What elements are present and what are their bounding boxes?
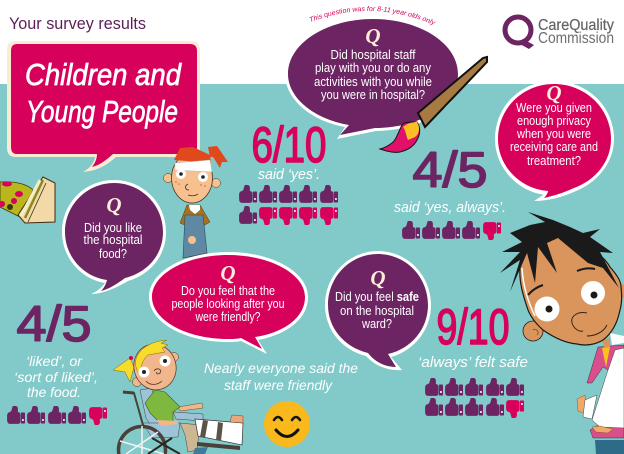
thumbs [8,406,107,425]
caption: said ‘yes’. [258,166,320,183]
Q mark: Q [365,24,381,48]
note: nearly everyone: Nearly everyone said the [204,360,358,376]
big number: 4/5 [412,142,488,198]
question text: you were in hospital? [321,88,425,102]
icon: paintbrush [380,57,487,152]
character: girl with head bandage [164,146,228,258]
big number: 6/10 [252,117,326,173]
question text [172,284,285,324]
panel: safety question [325,251,431,370]
result: 4/5 privacy [394,142,506,240]
caption: ‘sort of liked’, [14,369,98,385]
question text: play with you or do any [315,61,432,75]
note: nearly everyone [204,360,358,393]
big number: 4/5 [16,296,92,352]
question text: food? [99,247,127,261]
logo: Care Quality Commission: CareQuality [538,17,614,34]
question text: the hospital [84,233,142,247]
question text: Did you feel safe [335,290,419,304]
question text: ward? [361,317,392,331]
question text [84,221,142,261]
Q mark: Q [220,261,236,285]
thumbs [402,221,501,240]
thumbs row 1 [426,378,524,396]
caption [14,353,98,400]
logo: Care Quality Commission [505,17,614,49]
caption: the food. [27,384,81,400]
logo: Care Quality Commission: Commission [538,30,614,47]
question text: when you were [516,127,591,141]
title text: Young People [26,94,178,129]
question text [314,48,432,102]
question text: people looking after you [172,297,285,311]
caption: ‘always’ felt safe [418,354,528,371]
thumbs row 2 [426,398,524,418]
caption: ‘liked’, or [26,353,83,369]
question text [335,290,419,331]
question text: receiving care and [510,140,598,154]
question text: enough privacy [517,114,592,128]
thumbs row 1 [240,185,338,202]
question text: Do you feel that the [181,284,275,298]
icon: pizza and sandwich [0,177,55,223]
note: age limit: This question was for 8-11 year olds only [309,6,436,26]
Q mark: Q [546,81,562,105]
panel: privacy question [495,81,614,201]
result: 9/10 [418,299,528,418]
panel: hospital food question [62,180,166,294]
Q mark: Q [106,193,122,217]
character: boy with arm in sling [500,212,624,454]
title text: Children and [25,57,183,92]
panel: title speech bubble [7,41,200,172]
note: nearly everyone: staff were friendly [224,377,333,393]
question text [510,101,598,168]
title text [25,57,183,129]
heading: your survey results: Your survey results [9,14,146,33]
question text: Did hospital staff [330,48,416,62]
thumbs row 2 [240,206,338,225]
question text: treatment? [527,154,581,168]
caption: said ‘yes, always’. [394,199,506,216]
question text: were friendly? [195,310,261,324]
question text: Were you given [516,101,592,115]
Q mark: Q [370,266,386,290]
result: 4/5 food [8,296,107,425]
result: 6/10 [240,117,338,225]
panel: hospital staff question [285,16,461,139]
question text: on the hospital [340,304,414,318]
panel: friendly staff question [149,252,308,354]
question text: activities with you while [314,75,432,89]
question text: Did you like [84,221,142,235]
big number: 9/10 [436,299,510,355]
character: girl in wheelchair [113,339,243,454]
icon: smiley [264,401,310,447]
